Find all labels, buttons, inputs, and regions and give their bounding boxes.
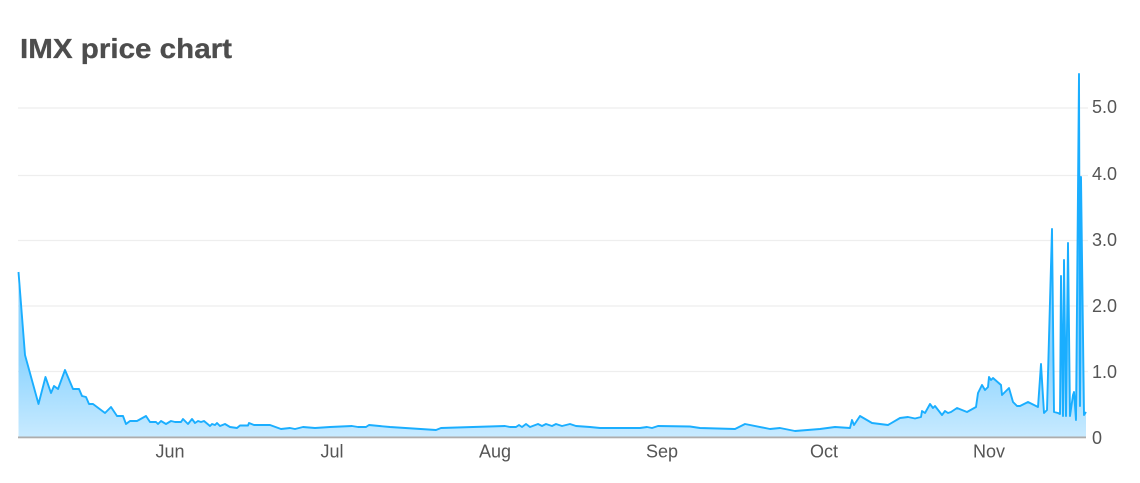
title: IMX price chart xyxy=(20,33,232,64)
y axis labels: 0 xyxy=(1092,428,1102,448)
y axis labels: 4.0 xyxy=(1092,164,1117,184)
x axis labels: Nov xyxy=(973,442,1005,462)
y axis labels: 2.0 xyxy=(1092,296,1117,316)
x axis labels: Sep xyxy=(646,442,678,462)
x axis labels: Oct xyxy=(810,442,838,462)
y axis labels xyxy=(1092,97,1117,448)
x axis labels: Jul xyxy=(320,442,344,462)
y axis labels: 3.0 xyxy=(1092,230,1117,250)
price area fill xyxy=(18,74,1086,437)
y axis labels: 5.0 xyxy=(1092,97,1117,117)
y axis labels: 1.0 xyxy=(1092,362,1117,382)
x axis labels: Jun xyxy=(155,442,185,462)
x axis labels xyxy=(155,442,1005,462)
price line xyxy=(18,74,1086,431)
x axis labels: Aug xyxy=(479,442,511,462)
x axis baseline xyxy=(18,436,1086,438)
